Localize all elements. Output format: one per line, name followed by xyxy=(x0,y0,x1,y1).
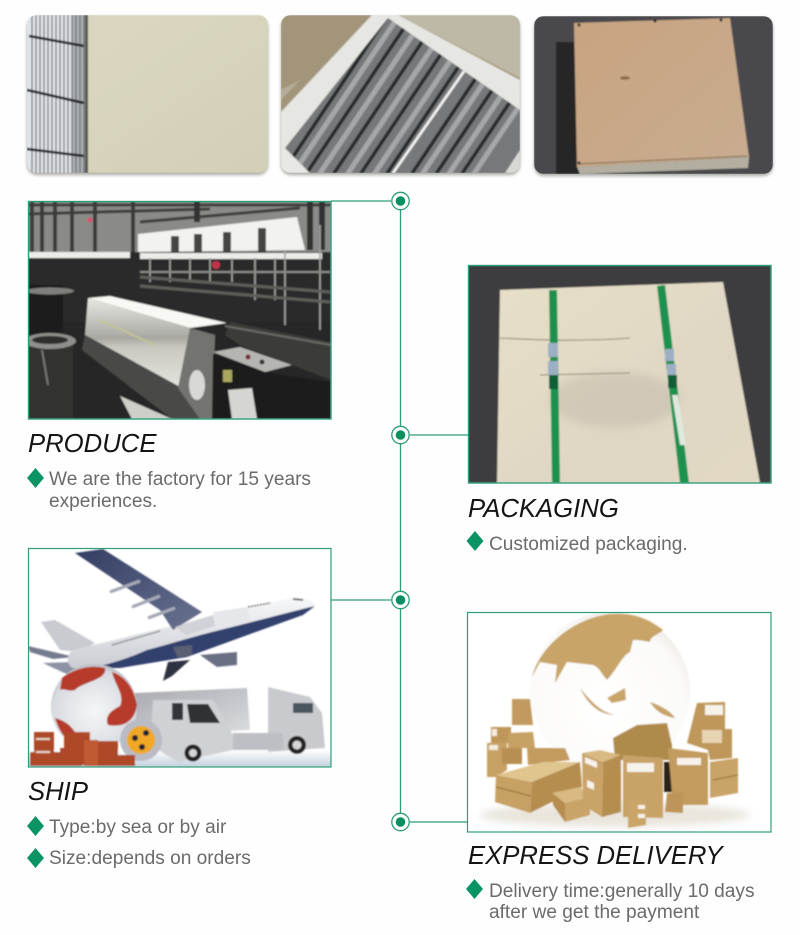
globe xyxy=(530,612,690,772)
text: ship size: Size:depends on orders xyxy=(49,848,251,869)
right box xyxy=(668,748,708,805)
panel: ship xyxy=(27,548,331,869)
node: express delivery xyxy=(392,813,409,831)
panel: express delivery xyxy=(466,612,771,923)
panel: produce xyxy=(24,201,331,512)
left group xyxy=(512,699,533,725)
node: ship xyxy=(392,591,409,609)
timeline connector xyxy=(331,192,468,831)
node: produce xyxy=(392,192,409,210)
long truck xyxy=(135,687,325,754)
tiny box xyxy=(627,816,647,829)
text: produce description: experiences. xyxy=(49,491,157,512)
text: packaging description: Customized packaging. xyxy=(489,534,688,555)
bullet icon xyxy=(466,879,483,899)
photo: strapped board xyxy=(468,265,771,483)
tall middle box xyxy=(582,750,621,762)
top photo row xyxy=(25,15,775,178)
photo: rolled and flat filter cloth xyxy=(27,15,268,175)
panel: packaging xyxy=(466,265,771,555)
text: ship type: Type:by sea or by air xyxy=(49,817,227,838)
bullet icon xyxy=(27,468,44,488)
large box xyxy=(496,762,580,782)
heading: ship: SHIP xyxy=(28,778,88,806)
text: delivery description: Delivery time:generally 10 days xyxy=(489,881,755,902)
photo: plywood box on dark floor xyxy=(534,16,773,176)
photo: weaving loom factory xyxy=(24,201,331,419)
text: produce description: We are the factory for 15 years xyxy=(49,469,311,490)
box with label xyxy=(623,755,663,818)
brown boxes xyxy=(30,732,135,766)
illustration: cardboard globe and parcels xyxy=(467,612,771,832)
gauge xyxy=(120,719,162,761)
dark gap xyxy=(664,762,673,792)
red globe xyxy=(51,664,137,750)
parcels xyxy=(487,699,738,828)
right stack xyxy=(687,702,732,760)
photo: mesh rollers in crate xyxy=(279,15,522,177)
plane xyxy=(28,549,315,681)
text: delivery description: after we get the payment xyxy=(489,902,700,923)
heading: produce: PRODUCE xyxy=(28,430,157,458)
floor box xyxy=(552,787,590,803)
node: packaging xyxy=(392,426,409,444)
bullet icon xyxy=(466,531,484,551)
bullet icon xyxy=(27,848,44,868)
bullet icon xyxy=(27,816,44,836)
van xyxy=(150,700,233,762)
heading: packaging: PACKAGING xyxy=(468,495,619,523)
heading: express delivery: EXPRESS DELIVERY xyxy=(468,842,724,870)
illustration: plane, globe and trucks xyxy=(28,548,331,767)
